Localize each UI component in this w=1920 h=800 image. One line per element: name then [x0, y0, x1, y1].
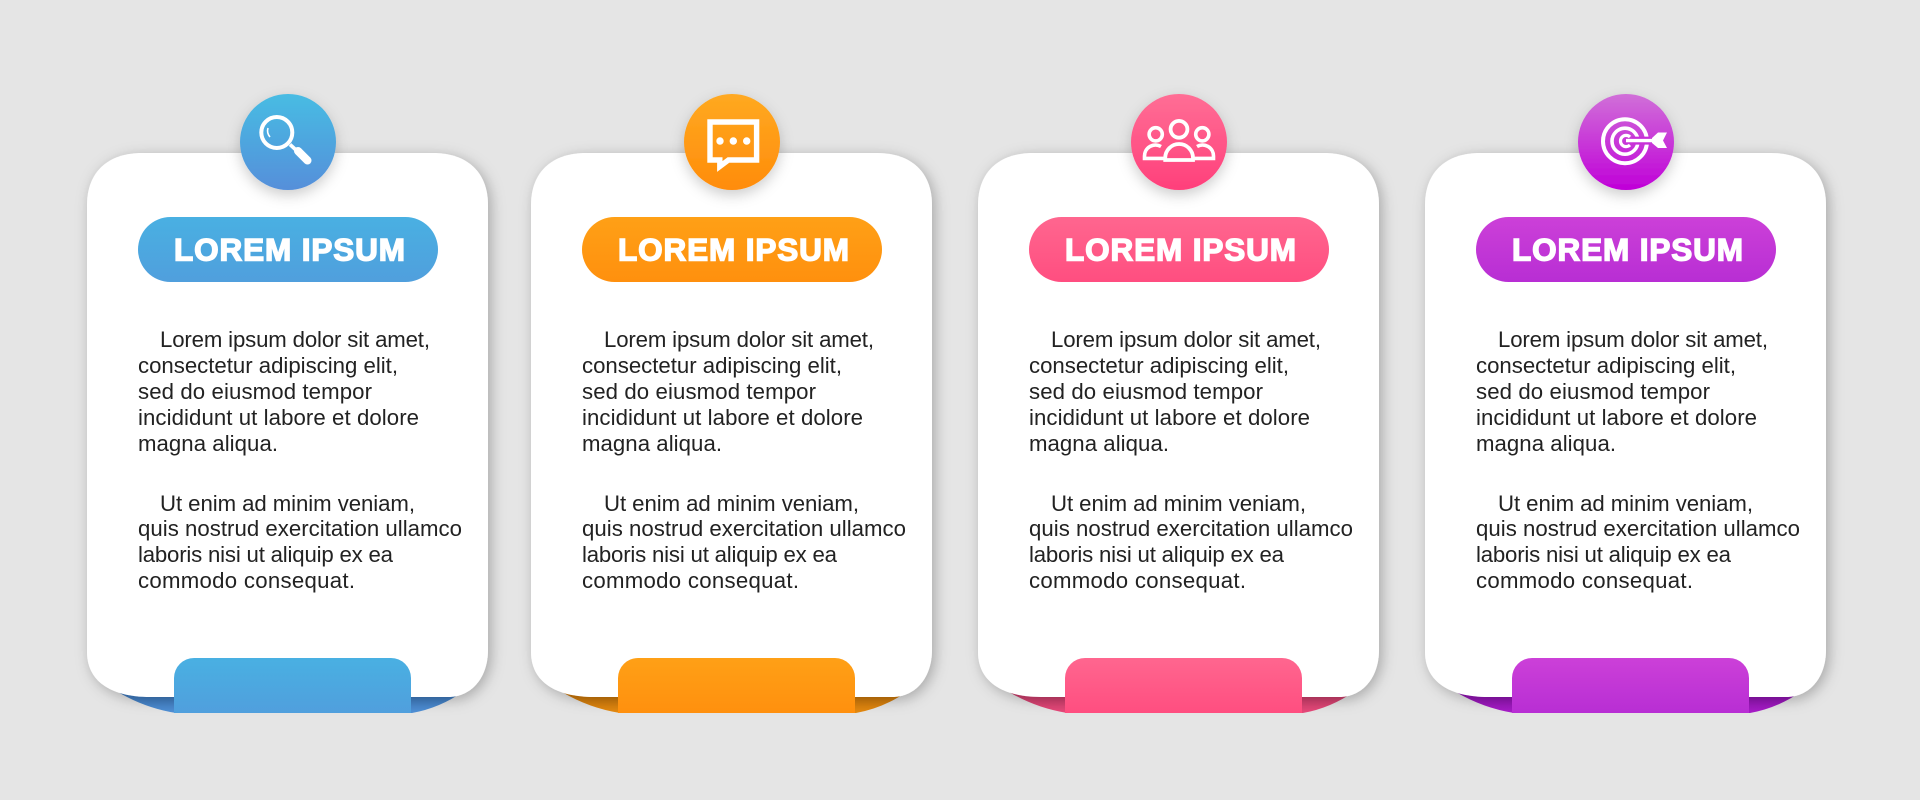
text block: incididunt ut labore et dolore — [582, 405, 863, 430]
icon: target with arrow — [1578, 94, 1674, 190]
panel: card 4 purple — [1425, 94, 1826, 713]
text block — [1476, 327, 1800, 593]
text block: Lorem ipsum dolor sit amet, — [160, 327, 430, 352]
text block: Ut enim ad minim veniam, — [1498, 491, 1753, 516]
text block: quis nostrud exercitation ullamco — [582, 516, 906, 541]
text block: laboris nisi ut aliquip ex ea — [138, 542, 394, 567]
text block: consectetur adipiscing elit, — [1029, 353, 1289, 378]
text block: magna aliqua. — [582, 431, 722, 456]
text block: laboris nisi ut aliquip ex ea — [582, 542, 838, 567]
heading pill — [582, 217, 882, 282]
panel: card 3 pink — [978, 94, 1379, 713]
card body — [1425, 153, 1826, 697]
heading pill — [1476, 217, 1776, 282]
text block: quis nostrud exercitation ullamco — [138, 516, 462, 541]
text block: commodo consequat. — [1029, 568, 1246, 593]
text block: magna aliqua. — [1476, 431, 1616, 456]
heading pill: LOREM IPSUM — [1065, 232, 1296, 268]
text block: sed do eiusmod tempor — [1476, 379, 1711, 404]
text block: sed do eiusmod tempor — [138, 379, 373, 404]
icon: chat bubble — [684, 94, 780, 190]
text block: Ut enim ad minim veniam, — [160, 491, 415, 516]
text block: Lorem ipsum dolor sit amet, — [1498, 327, 1768, 352]
text block: laboris nisi ut aliquip ex ea — [1476, 542, 1732, 567]
text block: Lorem ipsum dolor sit amet, — [604, 327, 874, 352]
ribbon wedge — [1009, 691, 1355, 713]
text block: incididunt ut labore et dolore — [138, 405, 419, 430]
bottom tab — [1065, 658, 1302, 713]
text block: commodo consequat. — [138, 568, 355, 593]
text block: sed do eiusmod tempor — [582, 379, 817, 404]
heading pill: LOREM IPSUM — [618, 232, 849, 268]
text block — [138, 327, 462, 593]
text block: Ut enim ad minim veniam, — [1051, 491, 1306, 516]
bottom tab — [618, 658, 855, 713]
text block: consectetur adipiscing elit, — [1476, 353, 1736, 378]
text block: incididunt ut labore et dolore — [1476, 405, 1757, 430]
text block: incididunt ut labore et dolore — [1029, 405, 1310, 430]
card body — [531, 153, 932, 697]
text block: commodo consequat. — [1476, 568, 1693, 593]
icon: magnifying glass — [240, 94, 336, 190]
text block: quis nostrud exercitation ullamco — [1476, 516, 1800, 541]
text block: Lorem ipsum dolor sit amet, — [1051, 327, 1321, 352]
panel: card 2 orange — [531, 94, 932, 713]
heading pill: LOREM IPSUM — [1512, 232, 1743, 268]
heading pill — [1029, 217, 1329, 282]
text block — [582, 327, 906, 593]
text block — [1029, 327, 1353, 593]
ribbon wedge — [1456, 691, 1802, 713]
ribbon wedge — [562, 691, 908, 713]
card body — [87, 153, 488, 697]
text block: sed do eiusmod tempor — [1029, 379, 1264, 404]
text block: consectetur adipiscing elit, — [138, 353, 398, 378]
bottom tab — [1512, 658, 1749, 713]
panel: card 1 blue — [87, 94, 488, 713]
text block: Ut enim ad minim veniam, — [604, 491, 859, 516]
bottom tab — [174, 658, 411, 713]
text block: consectetur adipiscing elit, — [582, 353, 842, 378]
text block: laboris nisi ut aliquip ex ea — [1029, 542, 1285, 567]
card body — [978, 153, 1379, 697]
text block: commodo consequat. — [582, 568, 799, 593]
ribbon wedge — [118, 691, 464, 713]
text block: magna aliqua. — [1029, 431, 1169, 456]
icon: people group — [1131, 94, 1227, 190]
heading pill: LOREM IPSUM — [174, 232, 405, 268]
text block: quis nostrud exercitation ullamco — [1029, 516, 1353, 541]
heading pill — [138, 217, 438, 282]
text block: magna aliqua. — [138, 431, 278, 456]
